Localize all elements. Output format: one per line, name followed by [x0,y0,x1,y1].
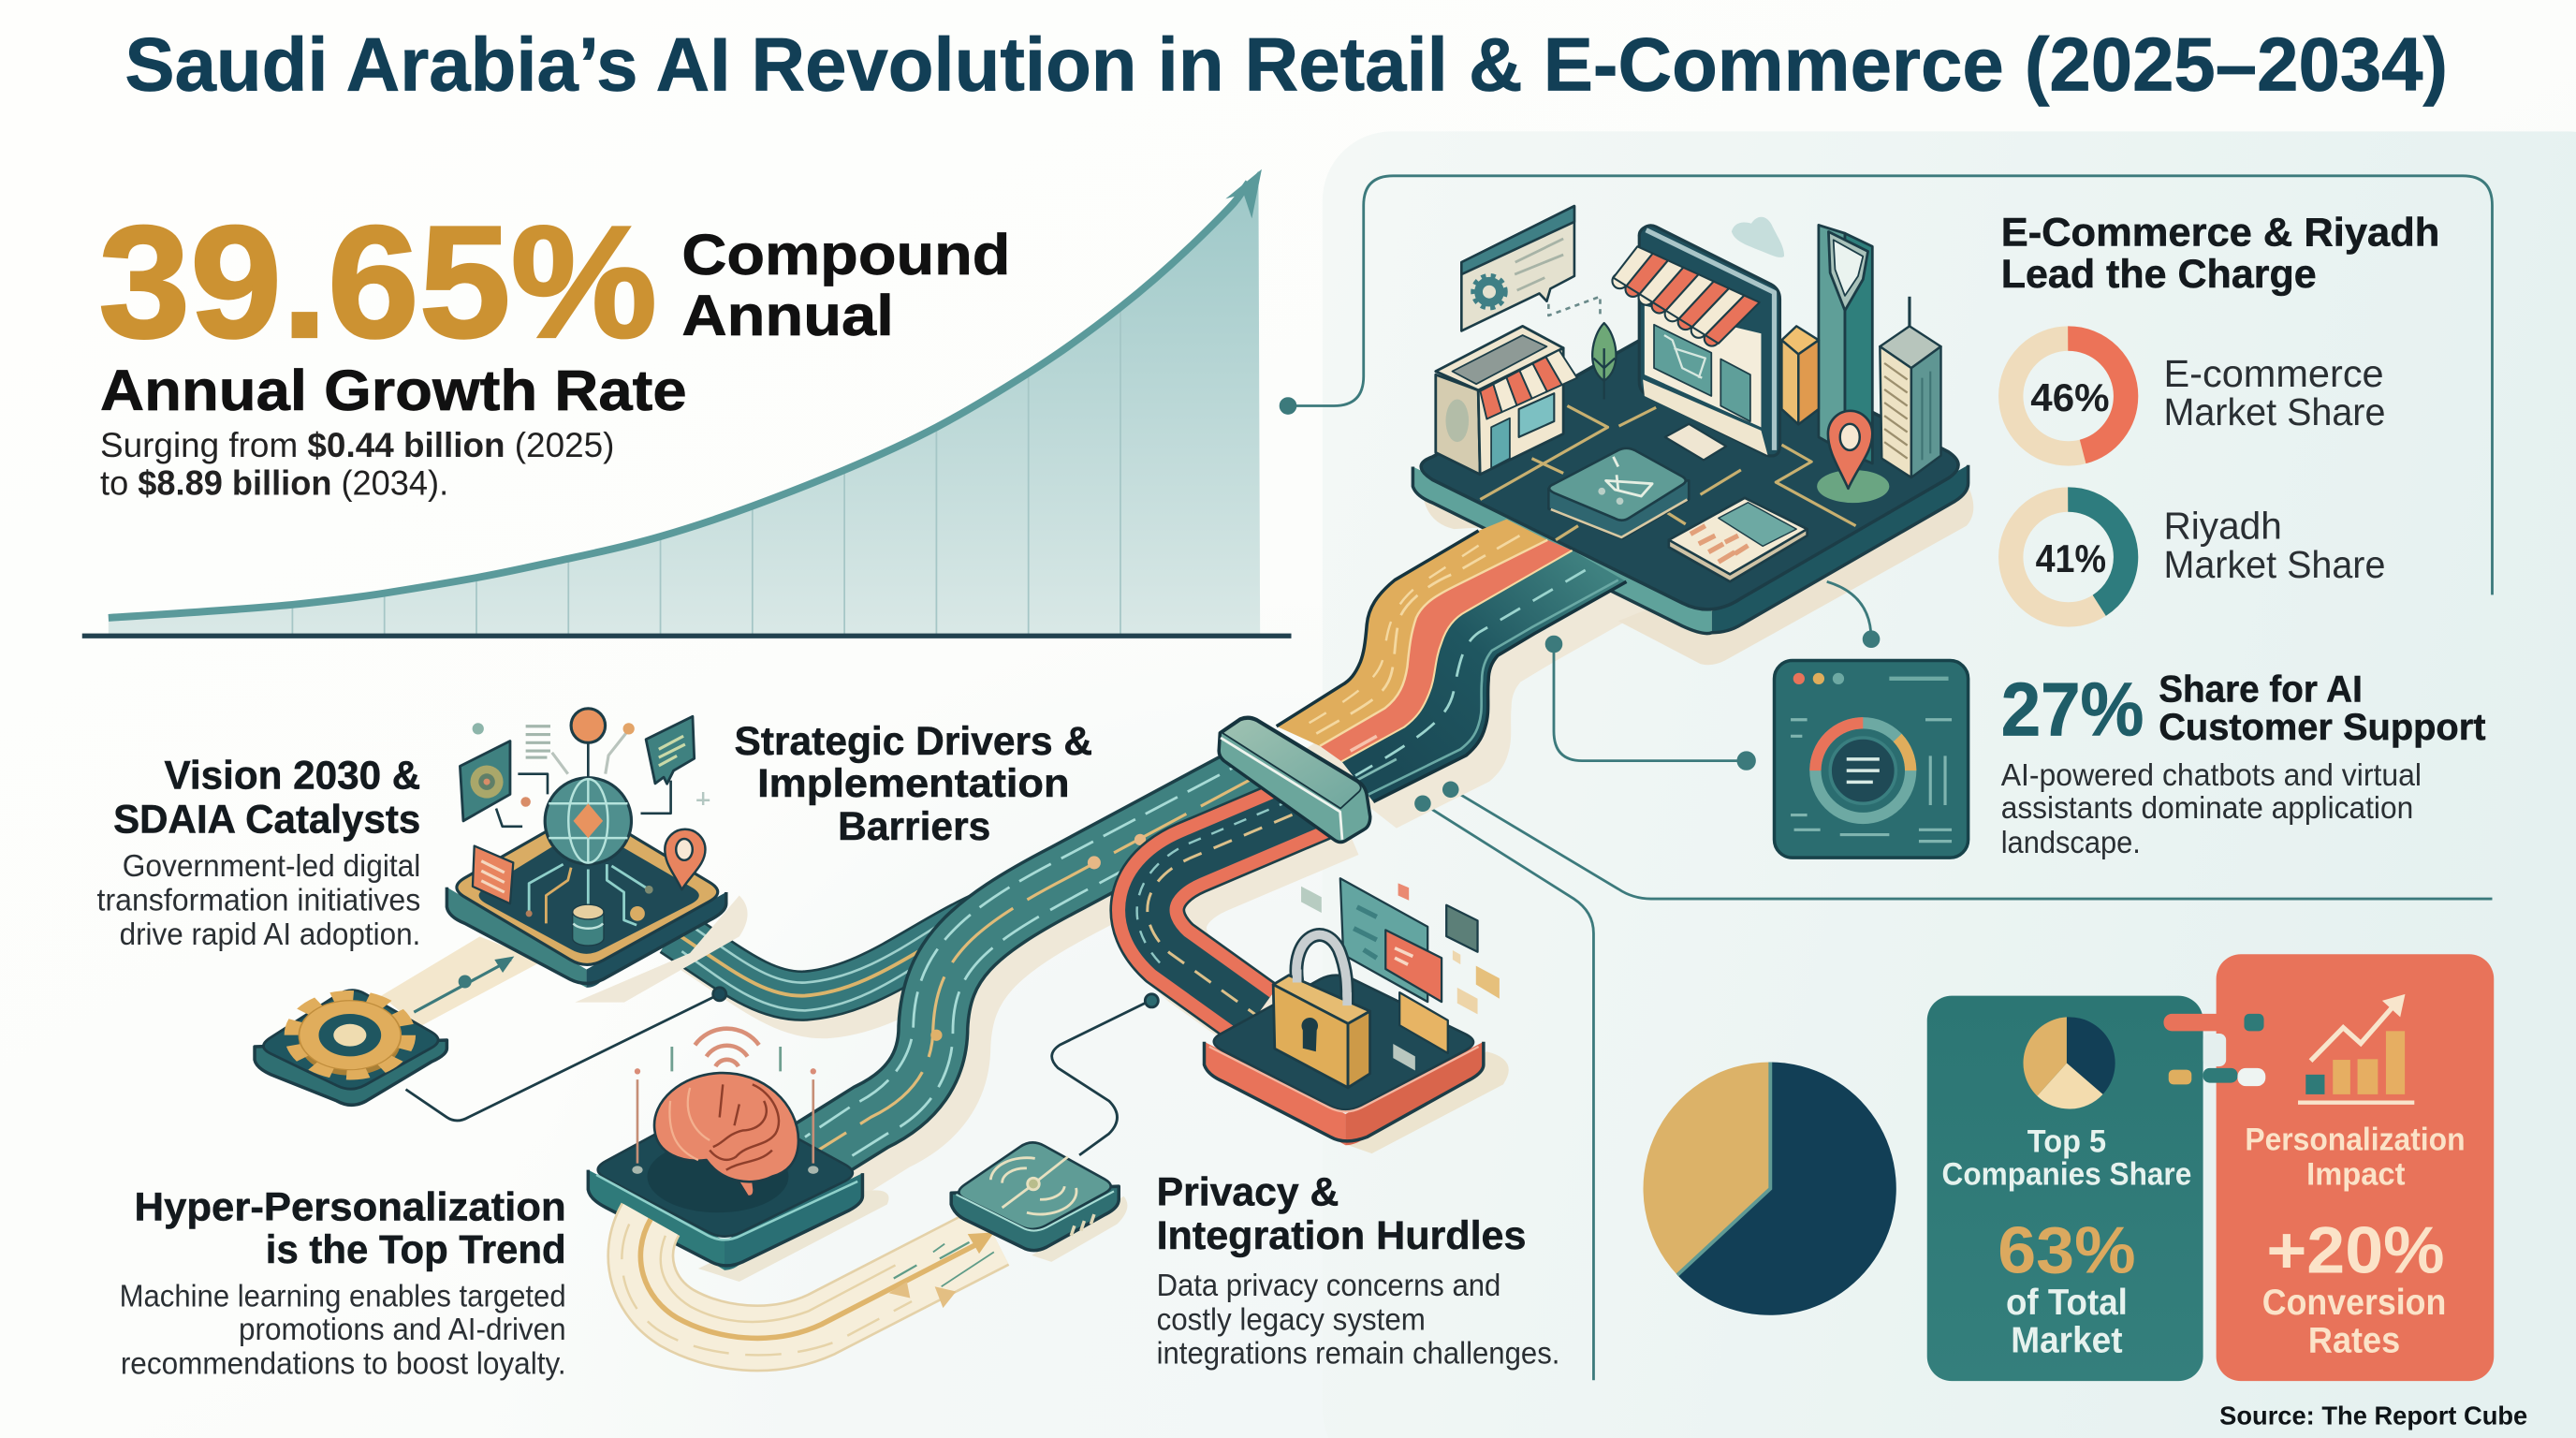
text: personalization impact: Personalization [2245,1123,2466,1158]
label: Compound Annual: Annual [681,284,894,348]
text: personalization impact: Impact [2306,1156,2405,1192]
Vision 2030 description: Government-led digital [123,849,420,884]
shopping district platform [1412,206,1973,665]
map pin [1817,411,1889,503]
label: Riyadh market share: Market Share [2163,543,2385,586]
heading: Vision 2030: Vision 2030 & [165,753,420,798]
platform shadow [575,896,748,1003]
text: conversion rates [2262,1283,2446,1360]
small corner shop [1436,326,1577,475]
heading: strategic drivers: Implementation [757,761,1070,806]
text: top 5 companies share: Companies Share [1942,1156,2191,1192]
AI support description: AI-powered chatbots and virtual [2001,758,2422,793]
heading: hyper-personalization [135,1184,566,1272]
hyper-personalization description: promotions and AI-driven [239,1313,566,1347]
black connector: gear to road [406,988,726,1121]
growth description [100,426,614,502]
platform shadow [1423,479,1973,665]
heading: hyper-personalization: is the Top Trend [266,1227,566,1272]
small gold building [1781,326,1819,424]
Vision 2030 description: drive rapid AI adoption. [120,917,420,952]
road: tri-colour upper section [1277,520,1627,801]
road: main teal branch to brain platform [805,753,1284,1170]
text: top 5 companies share: Top 5 [2027,1123,2106,1159]
heading: privacy [1157,1170,1526,1258]
tree [1592,323,1616,399]
stat: 27% share for AI customer support [2001,668,2485,752]
stat: 27% share for AI customer support: 27% [2001,668,2144,752]
donut: 46% e-commerce: 46% [2030,375,2110,419]
privacy description: Data privacy concerns and [1157,1269,1500,1303]
text: of total market: of Total [2006,1283,2128,1323]
label: Compound Annual: Compound [681,223,1010,287]
kingdom centre tower [1819,225,1872,463]
label: Annual Growth Rate: Annual Growth Rate [100,359,687,423]
platform shadow [1339,1051,1509,1153]
cart tile [1548,448,1689,538]
title: Saudi Arabia’s AI Revolution in Retail & E-Commerce (2025–2034) [124,23,2448,108]
road: upper branch to Vision platform [674,907,986,1010]
growth area chart [82,169,1292,638]
label: e-commerce market share: E-commerce [2163,352,2384,395]
donut: 41% Riyadh [2011,500,2126,614]
wireless device tile [951,1142,1127,1262]
icon: customer support dashboard [1775,661,1969,858]
platform street lines [1480,406,1856,540]
connector: device to coral road [1052,994,1158,1155]
striped awning [1612,246,1760,346]
platform side and top [1204,1042,1345,1145]
road ground shadow [695,546,1649,1177]
pie chart: 63% market share [1644,1062,1896,1315]
platform side and rim [446,888,587,988]
hyper-personalization description: recommendations to boost loyalty. [121,1346,566,1381]
brain platform [588,1029,889,1282]
label: Compound Annual [681,223,1010,348]
tablet [1669,498,1808,581]
lock platform [1204,878,1509,1153]
cloud [1732,217,1784,257]
road outline and rims [1277,531,1627,801]
monitor storefront [1639,226,1779,460]
heading: E-Commerce & Riyadh [2001,211,2439,297]
icon: globe [545,778,631,864]
icon: small pie [2023,1017,2115,1109]
heading: strategic drivers [735,719,1092,849]
road clamp [1219,717,1370,842]
Vision 2030 description [97,849,420,952]
icon: brain [654,1073,798,1196]
AI support description [2001,758,2422,860]
hyper-personalization description: Machine learning enables targeted [120,1279,566,1313]
label: Riyadh market share [2163,505,2385,586]
connector lines: lower right [1423,788,2492,1380]
platform shadow [698,1190,889,1282]
heading: Vision 2030 [113,753,420,842]
platform side and top [588,1170,724,1270]
privacy description [1157,1269,1559,1372]
heading: E-Commerce & Riyadh: E-Commerce & Riyadh [2001,211,2439,256]
heading: E-Commerce & Riyadh: Lead the Charge [2001,252,2317,297]
text: conversion rates: Rates [2308,1320,2400,1360]
AI support description: assistants dominate application [2001,791,2413,826]
icon: document card [473,846,513,903]
Vision 2030 description: transformation initiatives [97,883,420,917]
icon: data panels [1340,878,1478,1053]
heading: privacy: Integration Hurdles [1157,1213,1526,1258]
icon: location pin [665,829,705,889]
stat: 27% share for AI customer support: Share for AI [2159,668,2363,710]
card: personalization impact [2217,954,2494,1381]
source note: Source: The Report Cube [2219,1401,2527,1431]
card connector tabs [2163,1014,2265,1086]
text: conversion rates: Conversion [2262,1283,2446,1323]
text: personalization impact [2245,1123,2466,1192]
icon: speech panel [646,716,695,784]
heading: privacy: Privacy & [1157,1170,1339,1215]
icon: circuit traces [529,864,649,925]
gear platform [255,936,542,1105]
icon: rising bar chart [2298,994,2414,1103]
text: of total market: Market [2011,1320,2123,1360]
growth description: Surging from $0.44 billion (2025) [100,426,614,464]
text: of total market [2006,1283,2128,1360]
icon: padlock [1273,935,1370,1088]
icon: gear panel [460,741,510,821]
heading: Vision 2030: SDAIA Catalysts [113,797,420,842]
beige ground loop road to brain platform [622,1219,994,1355]
platform base [1412,466,1712,634]
skyscraper [1880,297,1940,477]
connector dots over roads [1414,782,1459,812]
speech bubble with gear [1461,206,1600,330]
hyper-personalization description [120,1279,566,1381]
stat: +20%: +20% [2266,1212,2445,1286]
icon: network nodes above globe [473,709,710,827]
growth description: to $8.89 billion (2034). [100,463,448,502]
donut: 46% e-commerce [2011,339,2126,453]
stat: 63%: 63% [1998,1212,2136,1286]
heading: strategic drivers: Strategic Drivers & [735,719,1092,764]
icon: wifi signal [672,1029,781,1071]
road: coral branch to lock platform [1137,790,1323,1016]
connector frame: e-commerce panel [1281,176,2492,594]
stat: 27% share for AI customer support: Customer Support [2159,707,2485,748]
heading: hyper-personalization: Hyper-Personalization [135,1184,566,1229]
label: Riyadh market share: Riyadh [2163,505,2282,548]
card: top 5 companies [1927,996,2203,1381]
headline stat: 39.65%: 39.65% [98,194,657,372]
connector: platform to dashboard [1546,581,1879,769]
donut: 41% Riyadh: 41% [2036,536,2106,580]
privacy description: costly legacy system [1157,1303,1426,1338]
icon: database cylinder [573,904,604,946]
text: top 5 companies share [1942,1123,2191,1192]
vision platform with globe [446,709,748,1003]
AI support description: landscape. [2001,826,2141,860]
label: e-commerce market share: Market Share [2163,390,2385,433]
privacy description: integrations remain challenges. [1157,1337,1559,1372]
heading: strategic drivers: Barriers [838,804,990,849]
label: e-commerce market share [2163,352,2385,433]
